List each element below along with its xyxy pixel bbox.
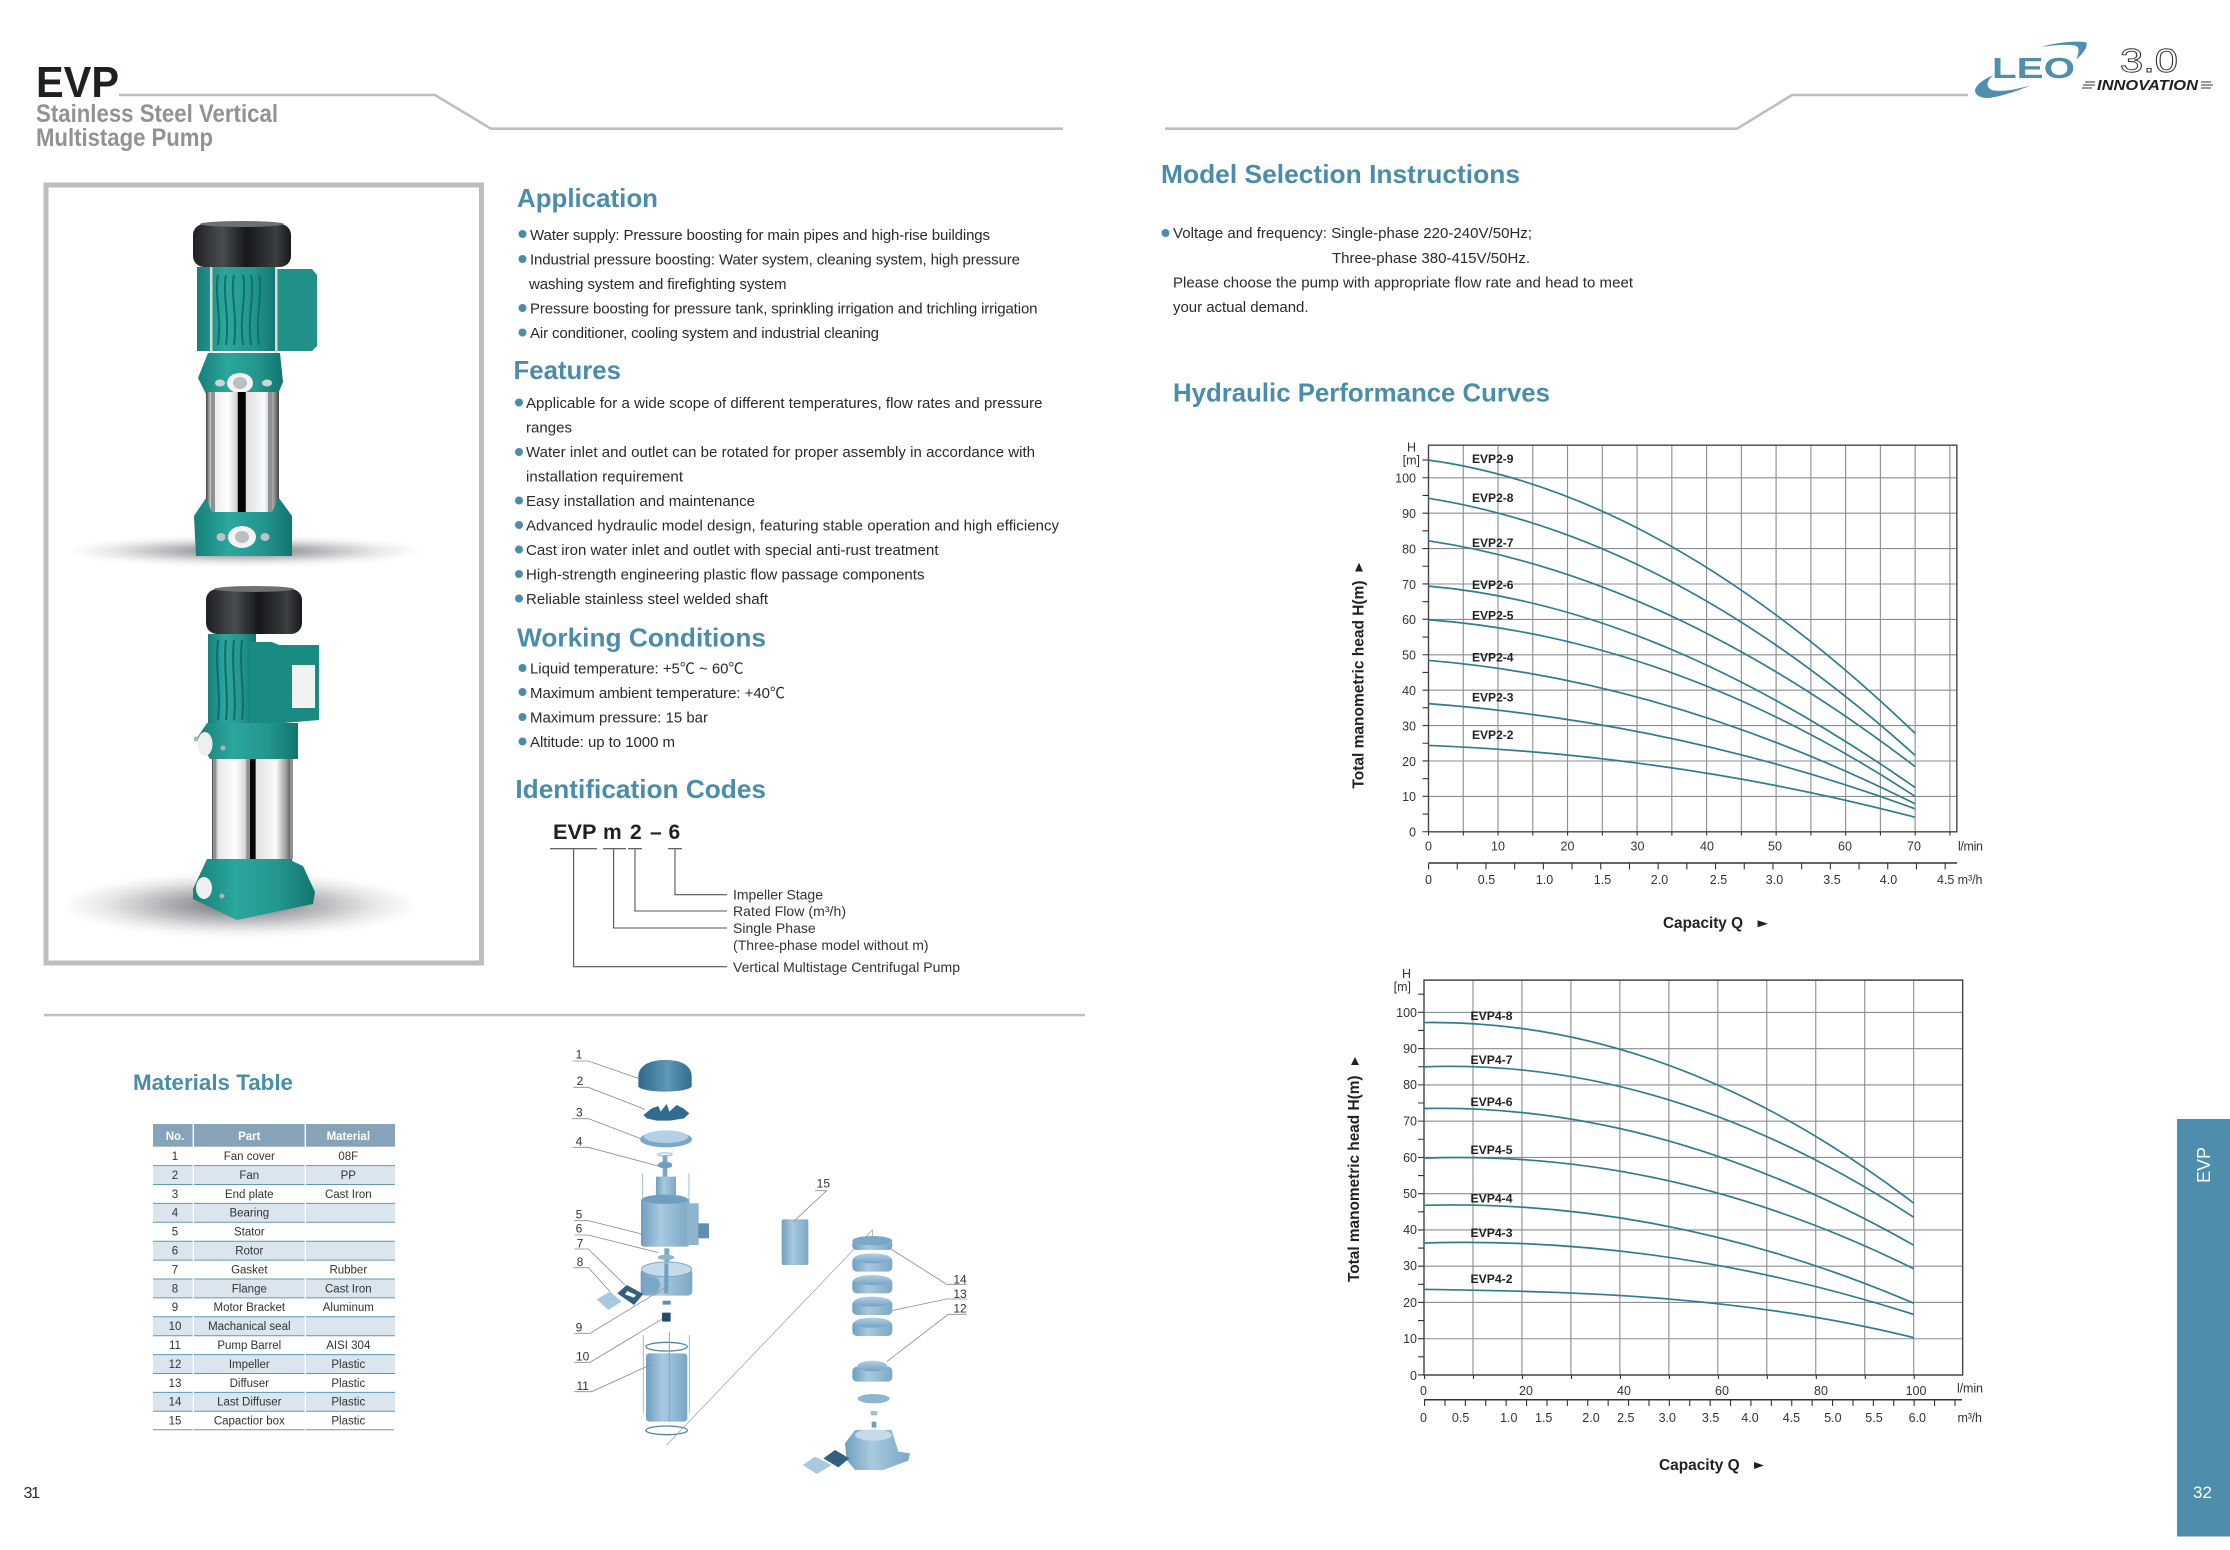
curve labels: [1470, 1009, 1513, 1286]
x axis l/min labels: 60: [1838, 839, 1852, 853]
text block: features list: installation requirement: [526, 468, 684, 486]
y axis labels: H: [1407, 440, 1416, 454]
table: materials: Material: [327, 1131, 370, 1143]
part number labels: 14: [953, 1272, 967, 1286]
x axis m3/h labels: 5.5: [1865, 1411, 1883, 1425]
x axis l/min labels: 20: [1561, 839, 1574, 853]
curve labels: EVP2-5: [1472, 608, 1514, 622]
x axis m3/h labels: 2.5: [1710, 873, 1727, 887]
y axis labels: 90: [1403, 1042, 1417, 1056]
x axis m3/h labels: 3.0: [1766, 873, 1783, 887]
table: materials: Fan: [239, 1170, 259, 1182]
text block: features list: Easy installation and maintenance: [526, 493, 755, 510]
table: materials: 1: [172, 1151, 178, 1163]
x axis m3/h labels: 6.0: [1909, 1411, 1926, 1425]
x axis m3/h labels: 4.5: [1783, 1411, 1800, 1425]
part 4 bearing and shaft: [658, 1153, 672, 1179]
y axis labels: 30: [1403, 1259, 1417, 1273]
table: materials: Plastic: [331, 1397, 365, 1409]
curve labels: EVP4-7: [1470, 1053, 1513, 1067]
y axis labels: 50: [1402, 649, 1416, 663]
title: EVP Stainless Steel Vertical Multistage Pump: Stainless Steel Vertical: [36, 100, 278, 128]
x axis l/min labels: [1425, 839, 1983, 853]
logo: LEO 3.0 Innovation: 3.0: [2120, 42, 2178, 79]
part 2 fan: [643, 1104, 689, 1121]
x axis m3/h labels: 1.5: [1535, 1411, 1552, 1425]
x axis m3/h labels: 1.0: [1500, 1411, 1518, 1425]
y axis labels: H: [1402, 967, 1411, 981]
part 12 impeller: [852, 1361, 892, 1382]
curve labels: EVP4-6: [1470, 1095, 1513, 1109]
y axis labels: 20: [1402, 755, 1416, 769]
chart: EVP2 performance curves: [1351, 440, 1983, 932]
y axis labels: 0: [1409, 826, 1416, 840]
curve labels: EVP4-8: [1470, 1009, 1513, 1023]
axis title: head: Total manometric head H(m): [1351, 580, 1368, 788]
axis ticks: [1426, 459, 1957, 866]
logo: LEO 3.0 Innovation: INNOVATION: [2097, 77, 2199, 94]
text block: features list: [515, 395, 1060, 608]
table: materials: Part: [238, 1131, 261, 1143]
table: materials: Diffuser: [230, 1378, 269, 1390]
part 3 end plate: [640, 1130, 692, 1147]
curve labels: EVP2-2: [1472, 728, 1514, 742]
x axis m3/h labels: 2.0: [1582, 1411, 1600, 1425]
y axis labels: 80: [1403, 1078, 1417, 1092]
table: materials: 08F: [338, 1151, 358, 1163]
x axis l/min labels: 30: [1631, 839, 1644, 853]
curve labels: EVP2-4: [1472, 651, 1514, 665]
text block: features list: Applicable for a wide scope of different temperatures, flow rates and pressure: [526, 395, 1042, 412]
part number labels: [576, 1048, 967, 1393]
part 9 motor bracket: [641, 1262, 692, 1296]
y axis labels: 30: [1402, 719, 1416, 733]
x axis m3/h labels: 2.5: [1617, 1411, 1635, 1425]
plot grid and curves: [1424, 980, 1963, 1375]
diagram: identification code breakdown: EVP: [553, 821, 596, 844]
table: materials: 5: [172, 1227, 178, 1239]
text block: working conditions list: Maximum ambient temperature: +40℃: [530, 685, 785, 702]
text block: voltage and selection instructions: [1162, 225, 1634, 316]
x axis m3/h labels: 0: [1420, 1411, 1427, 1425]
table: materials: 15: [169, 1416, 181, 1428]
plot grid and curves: [1428, 445, 1957, 832]
table: materials: Plastic: [331, 1378, 365, 1390]
heading: Features: Features: [514, 355, 621, 385]
y axis labels: 10: [1403, 1332, 1417, 1346]
text block: working conditions list: Maximum pressure: 15 bar: [530, 709, 708, 726]
y axis labels: 70: [1403, 1114, 1417, 1128]
x axis l/min labels: 100: [1906, 1384, 1926, 1398]
axis ticks: [1421, 990, 1962, 1403]
pump 2 shadow: [62, 873, 418, 937]
y axis labels: 0: [1410, 1369, 1417, 1383]
table: materials: [153, 1124, 395, 1430]
text block: features list: Reliable stainless steel welded shaft: [526, 591, 769, 608]
text block: application list: Industrial pressure boosting: Water system, cleaning system, high pressure: [530, 252, 1020, 268]
text block: voltage and selection instructions: Three-phase 380-415V/50Hz.: [1332, 250, 1530, 267]
table: materials: Cast Iron: [325, 1189, 372, 1201]
x axis l/min labels: l/min: [1958, 839, 1983, 853]
curve labels: EVP4-4: [1470, 1191, 1513, 1205]
leader lines: [572, 1061, 967, 1392]
table: materials: AISI 304: [326, 1340, 371, 1352]
part number labels: 5: [576, 1207, 583, 1221]
part number labels: 4: [576, 1134, 583, 1148]
table: materials: Flange: [232, 1283, 267, 1295]
part number labels: 2: [577, 1074, 584, 1088]
page number 31: 31: [24, 1485, 40, 1502]
y axis labels: 70: [1402, 578, 1416, 592]
part number labels: 3: [576, 1106, 583, 1120]
x axis l/min labels: 80: [1814, 1384, 1828, 1398]
x axis l/min labels: 40: [1617, 1384, 1631, 1398]
x axis l/min labels: 60: [1715, 1384, 1729, 1398]
y axis labels: [m]: [1403, 454, 1420, 468]
heading: Working Conditions: Working Conditions: [517, 623, 766, 653]
table: materials: Machanical seal: [208, 1321, 291, 1333]
table: materials: Capactior box: [214, 1416, 285, 1428]
x axis m3/h labels: m³/h: [1958, 1411, 1982, 1425]
part 11 pump barrel: [643, 1332, 689, 1435]
diagram: identification code breakdown: [550, 821, 960, 975]
curve labels: EVP2-6: [1472, 578, 1514, 592]
part number labels: 15: [817, 1176, 830, 1190]
part number labels: 7: [577, 1236, 584, 1250]
table: materials: PP: [341, 1170, 356, 1182]
curve labels: EVP2-7: [1472, 536, 1514, 550]
heading: Model Selection Instructions: Model Selection Instructions: [1161, 159, 1520, 189]
y axis labels: 60: [1403, 1151, 1417, 1165]
text block: working conditions list: Liquid temperature: +5℃ ~ 60℃: [530, 660, 744, 677]
pump base with seal pieces: [803, 1394, 910, 1474]
table: materials: Rubber: [329, 1264, 367, 1276]
sidebar tab with section name and page number: 32: [2193, 1483, 2212, 1502]
panel: product photo frame: [46, 185, 482, 963]
pump 1: front view: [193, 221, 317, 556]
table: materials: Last Diffuser: [217, 1397, 282, 1409]
x axis m3/h labels: 1.5: [1594, 873, 1611, 887]
table: materials: 6: [172, 1246, 178, 1258]
part number labels: 11: [576, 1379, 589, 1393]
curve labels: EVP2-3: [1472, 691, 1514, 705]
part 15 capacitor box: [782, 1219, 808, 1265]
chart: EVP4 performance curves: [1346, 967, 1983, 1474]
curve labels: EVP4-5: [1470, 1143, 1513, 1157]
table: materials: No.: [166, 1131, 184, 1143]
axis title: capacity: Capacity Q: [1659, 1457, 1740, 1474]
table: materials: 11: [169, 1340, 181, 1352]
table: materials: Cast Iron: [325, 1283, 372, 1295]
text block: voltage and selection instructions: your actual demand.: [1173, 299, 1308, 316]
x axis m3/h labels: 0.5: [1478, 873, 1495, 887]
diagram: identification code breakdown: Rated Flow (m³/h): [733, 903, 846, 919]
y axis labels: 40: [1402, 684, 1416, 698]
table: materials: 12: [169, 1359, 181, 1371]
part 8 flange: [597, 1292, 622, 1310]
text block: features list: Cast iron water inlet and outlet with special anti-rust treatment: [526, 542, 939, 559]
x axis l/min labels: 20: [1519, 1384, 1533, 1398]
text block: working conditions list: [518, 660, 785, 751]
part number labels: 9: [576, 1320, 583, 1334]
x axis l/min labels: 10: [1491, 839, 1505, 853]
text block: voltage and selection instructions: Please choose the pump with appropriate flow rate and head to meet: [1173, 274, 1634, 292]
x axis m3/h labels: 1.0: [1536, 873, 1553, 887]
curve labels: EVP4-2: [1470, 1272, 1513, 1286]
sidebar tab with section name and page number: EVP: [2194, 1147, 2214, 1183]
part 7 gasket: [617, 1285, 643, 1305]
diagram: identification code breakdown: Impeller Stage: [733, 886, 823, 902]
curve labels: EVP2-9: [1472, 452, 1514, 466]
x axis l/min labels: l/min: [1957, 1382, 1983, 1396]
x axis m3/h labels: [1425, 873, 1983, 887]
y axis labels: 60: [1402, 613, 1416, 627]
y axis labels: [m]: [1394, 980, 1411, 994]
table: materials: 13: [169, 1378, 181, 1390]
heading: Identification Codes: Identification Codes: [515, 774, 766, 804]
table: materials: 14: [169, 1397, 182, 1409]
part 1 fan cover: [638, 1060, 692, 1092]
heading: Materials Table: Materials Table: [133, 1070, 293, 1095]
y axis labels: 100: [1395, 472, 1416, 486]
text block: application list: washing system and firefighting system: [528, 276, 786, 293]
part number labels: 12: [953, 1302, 967, 1316]
part 6 rotor shaft: [658, 1248, 674, 1268]
diagram: identification code breakdown: Single Phase: [733, 920, 816, 936]
y axis labels: 80: [1402, 542, 1416, 556]
y axis labels: [1394, 967, 1417, 1383]
part number labels: 8: [577, 1255, 584, 1269]
x axis m3/h labels: 2.0: [1651, 873, 1668, 887]
x axis m3/h labels: 4.5 m³/h: [1937, 873, 1983, 887]
curve labels: EVP4-3: [1470, 1226, 1513, 1240]
x axis m3/h labels: 3.5: [1702, 1411, 1719, 1425]
table: materials: Gasket: [231, 1264, 268, 1276]
curve labels: [1472, 452, 1514, 742]
x axis m3/h labels: 3.5: [1823, 873, 1841, 887]
text block: application list: [518, 227, 1038, 342]
table: materials: 2: [172, 1170, 178, 1182]
y axis labels: [1395, 440, 1420, 840]
part 10 mechanical seal: [662, 1301, 671, 1322]
text block: voltage and selection instructions: Voltage and frequency: Single-phase 220-240V/50Hz;: [1173, 225, 1532, 242]
curve labels: EVP2-8: [1472, 491, 1514, 505]
x axis l/min labels: 0: [1420, 1384, 1427, 1398]
sidebar tab with section name and page number: [2177, 1119, 2230, 1536]
y axis labels: 40: [1403, 1223, 1417, 1237]
part 13 diffusers and impellers stack: [852, 1253, 892, 1336]
x axis l/min labels: 50: [1768, 839, 1782, 853]
table: materials: 3: [172, 1189, 178, 1201]
diagram: identification code breakdown: 6: [668, 821, 680, 844]
diagram: identification code breakdown: m: [603, 821, 622, 844]
table: materials: Aluminum: [323, 1302, 374, 1314]
x axis m3/h labels: 5.0: [1824, 1411, 1842, 1425]
x axis m3/h labels: 3.0: [1659, 1411, 1676, 1425]
x axis m3/h labels: [1420, 1411, 1982, 1425]
table: materials: Rotor: [235, 1246, 264, 1258]
part number labels: 10: [576, 1350, 590, 1364]
text block: features list: Water inlet and outlet can be rotated for proper assembly in accordance with: [526, 444, 1035, 461]
table: materials: 8: [172, 1283, 178, 1295]
table: materials: Pump Barrel: [217, 1340, 281, 1352]
pump 2: side view: [193, 586, 319, 920]
title: EVP Stainless Steel Vertical Multistage Pump: Multistage Pump: [36, 124, 213, 152]
x axis l/min labels: 0: [1425, 839, 1432, 853]
x axis l/min labels: 70: [1907, 839, 1921, 853]
table: materials: Plastic: [331, 1359, 365, 1371]
title: EVP Stainless Steel Vertical Multistage Pump: [36, 58, 278, 152]
table: materials: 4: [172, 1208, 179, 1220]
part 14 last diffuser: [852, 1236, 892, 1250]
y axis labels: 50: [1403, 1187, 1417, 1201]
heading: Hydraulic Performance Curves: Hydraulic Performance Curves: [1173, 378, 1550, 408]
logo: LEO 3.0 Innovation: [1975, 42, 2213, 98]
table: materials: Fan cover: [224, 1151, 275, 1163]
logo: LEO 3.0 Innovation: LEO: [1992, 53, 2075, 85]
table: materials: 7: [172, 1264, 178, 1276]
x axis m3/h labels: 4.0: [1741, 1411, 1759, 1425]
table: materials: Impeller: [229, 1359, 270, 1371]
x axis l/min labels: [1420, 1382, 1983, 1398]
x axis l/min labels: 40: [1700, 839, 1714, 853]
axis title: head: Total manometric head H(m): [1346, 1076, 1363, 1282]
text block: application list: Water supply: Pressure boosting for main pipes and high-rise buildings: [530, 227, 990, 244]
y axis labels: 90: [1402, 507, 1416, 521]
text block: features list: High-strength engineering plastic flow passage components: [526, 566, 924, 584]
part number labels: 6: [576, 1222, 583, 1236]
y axis labels: 20: [1403, 1296, 1417, 1310]
x axis m3/h labels: 0.5: [1452, 1411, 1469, 1425]
text block: working conditions list: Altitude: up to 1000 m: [530, 734, 675, 751]
y axis labels: 100: [1396, 1006, 1417, 1020]
diagram: identification code breakdown: (Three-phase model without m): [733, 937, 929, 953]
y axis labels: 10: [1402, 790, 1416, 804]
table: materials: Plastic: [331, 1416, 365, 1428]
part 5 stator and motor housing: [641, 1173, 709, 1247]
pump 1 shadow: [67, 537, 423, 565]
table: materials: Stator: [234, 1227, 265, 1239]
table: materials: End plate: [225, 1189, 274, 1201]
diagram: exploded view of pump: [572, 1048, 967, 1474]
part number labels: 1: [576, 1048, 583, 1062]
x axis m3/h labels: 0: [1425, 873, 1432, 887]
text block: features list: ranges: [526, 420, 572, 436]
x axis m3/h labels: 4.0: [1880, 873, 1897, 887]
diagram: identification code breakdown: 2: [630, 821, 642, 844]
table: materials: Bearing: [229, 1208, 269, 1220]
text block: application list: Air conditioner, cooling system and industrial cleaning: [530, 325, 879, 342]
table: materials: Motor Bracket: [214, 1302, 286, 1314]
axis title: capacity: Capacity Q: [1663, 915, 1743, 932]
table: materials: 10: [169, 1321, 181, 1333]
table: materials: 9: [172, 1302, 178, 1314]
text block: features list: Advanced hydraulic model design, featuring stable operation and high efficiency: [526, 518, 1060, 534]
text block: application list: Pressure boosting for pressure tank, sprinkling irrigation and trichling irrigation: [530, 300, 1038, 318]
diagram: identification code breakdown: –: [650, 821, 662, 844]
part number labels: 13: [953, 1287, 967, 1301]
title: EVP Stainless Steel Vertical Multistage Pump: EVP: [36, 58, 119, 107]
heading: Application: Application: [517, 183, 658, 213]
diagram: identification code breakdown: Vertical Multistage Centrifugal Pump: [733, 959, 960, 975]
